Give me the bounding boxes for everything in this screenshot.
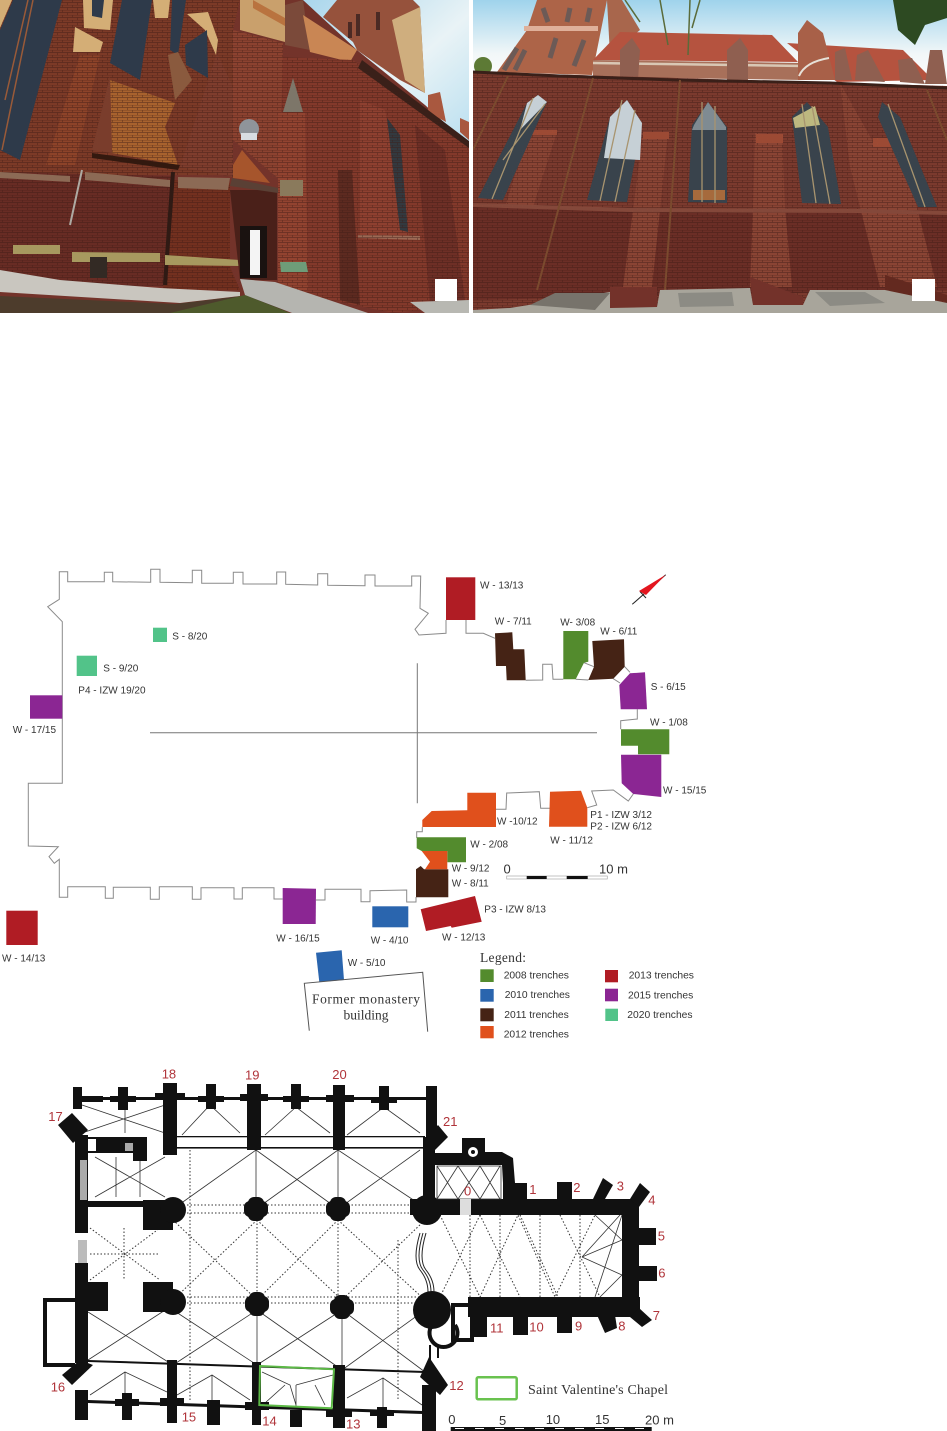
- buttress numbers: 6: [658, 1265, 666, 1280]
- red roofs: [593, 32, 798, 62]
- trenches 2020: [77, 628, 167, 676]
- buttress numbers: [48, 1066, 666, 1431]
- trench labels: W - 12/13: [442, 933, 486, 944]
- trench labels: W - 16/15: [276, 934, 320, 945]
- trench labels: W - 1/08: [650, 718, 688, 729]
- nave piers: [143, 1200, 173, 1230]
- stone bands: [72, 252, 160, 262]
- ground: [0, 270, 240, 303]
- white label square: [912, 279, 935, 301]
- chancel walls: [410, 1199, 638, 1215]
- axes: [150, 663, 597, 803]
- trench labels: W - 8/11: [452, 879, 489, 890]
- legend: Legend:: [480, 950, 526, 965]
- trenches 2015: [30, 672, 661, 924]
- sacristy: [435, 1138, 515, 1183]
- buttress numbers: 19: [245, 1067, 259, 1082]
- legend: 2015 trenches: [628, 990, 693, 1002]
- scale bar 20 m: 10: [546, 1412, 560, 1427]
- trench labels: P2 - IZW 6/12: [590, 822, 652, 833]
- north wall band: [73, 1097, 437, 1100]
- window bars: [492, 98, 925, 207]
- tower: [323, 0, 469, 140]
- trench labels: W - 7/11: [495, 616, 532, 628]
- buttress numbers: 11: [490, 1321, 504, 1336]
- trench labels: W - 11/12: [550, 836, 593, 847]
- north buttresses: [163, 1083, 177, 1155]
- trench labels: W - 2/08: [470, 840, 509, 851]
- trench labels: W- 3/08: [560, 618, 596, 628]
- chapel legend: Saint Valentine's Chapel: [528, 1383, 668, 1398]
- tower: [497, 0, 607, 75]
- tall windows: [0, 0, 208, 160]
- chapel legend: [477, 1377, 668, 1399]
- buttress numbers: 21: [443, 1114, 457, 1129]
- window glare: [520, 95, 642, 160]
- trench labels: W -10/12: [497, 817, 538, 828]
- tree on the left: [474, 57, 492, 72]
- buttress numbers: 20: [332, 1067, 347, 1082]
- legend: 2013 trenches: [629, 971, 694, 982]
- trench labels: W - 9/12: [452, 864, 490, 875]
- vault lines: [82, 1105, 622, 1408]
- wavy arch lines: [416, 1233, 434, 1292]
- passage and door: [230, 190, 277, 280]
- west wall stair openings: [78, 1139, 133, 1263]
- trench labels: [2, 580, 707, 969]
- trench labels: W - 6/11: [600, 626, 638, 638]
- scale bar 20 m: [448, 1412, 674, 1431]
- trench plan: [2, 569, 707, 1041]
- west porch: [45, 1300, 75, 1365]
- trench labels: W - 13/13: [480, 580, 524, 592]
- downpipes: [473, 76, 947, 290]
- church outline: [28, 569, 637, 902]
- buttresses: [505, 83, 937, 287]
- historic floor plan: [45, 1066, 674, 1431]
- right chapel wall: [282, 57, 469, 313]
- buttress numbers: 14: [262, 1413, 277, 1428]
- buttress numbers: 17: [48, 1109, 63, 1124]
- buttress numbers: 2: [573, 1180, 581, 1195]
- legend: 2011 trenches: [504, 1010, 569, 1021]
- scale bar 20 m: 20 m: [645, 1413, 674, 1428]
- middle wall: [233, 30, 283, 180]
- upper roofs: [240, 0, 285, 42]
- buttress numbers: 16: [51, 1380, 65, 1395]
- buttress numbers: 18: [162, 1066, 176, 1081]
- buttress and pinnacle: [180, 53, 233, 177]
- buttress numbers: 4: [648, 1192, 656, 1207]
- former monastery building: [304, 972, 428, 1032]
- trenches 2013: [6, 577, 482, 945]
- sky: [303, 0, 469, 145]
- buttress numbers: 3: [617, 1179, 624, 1194]
- buttress numbers: 0: [464, 1183, 471, 1198]
- trenches 2010: [316, 906, 408, 982]
- window mullions: [2, 0, 33, 150]
- buttress numbers: 12: [449, 1378, 464, 1393]
- buttress numbers: 5: [658, 1229, 665, 1244]
- trench labels: S - 6/15: [651, 682, 686, 693]
- former monastery building: building: [343, 1007, 389, 1022]
- south annex: [430, 1305, 472, 1347]
- trench labels: P3 - IZW 8/13: [484, 904, 546, 915]
- legend: 2008 trenches: [504, 970, 569, 981]
- legend: 2010 trenches: [505, 990, 570, 1001]
- corner diagonals: [58, 1113, 88, 1143]
- trench labels: W - 4/10: [371, 935, 409, 946]
- sunlit stonework: [0, 0, 218, 55]
- foliage: [893, 0, 947, 45]
- base courses: [610, 287, 657, 308]
- trench labels: W - 17/15: [13, 725, 56, 736]
- windows: [478, 95, 937, 207]
- scale bar 10 m: [504, 862, 628, 879]
- Saint Valentine's Chapel highlight: [259, 1366, 334, 1408]
- white label square: [435, 279, 457, 301]
- buttress numbers: 1: [529, 1182, 537, 1197]
- buttress numbers: 9: [575, 1319, 582, 1334]
- north arrow: [632, 575, 666, 604]
- transept: [423, 1137, 435, 1203]
- legend: 2012 trenches: [504, 1030, 569, 1041]
- lower chapel drum: [0, 172, 173, 286]
- scale bar 10 m: 10 m: [599, 862, 628, 876]
- main wall: [473, 72, 947, 313]
- trench labels: S - 9/20: [103, 664, 139, 675]
- left upper wall: [0, 0, 240, 175]
- tile roof: [110, 80, 178, 165]
- buttress numbers: 7: [653, 1308, 660, 1323]
- buttress numbers: 15: [182, 1410, 196, 1425]
- west wall: [75, 1135, 88, 1233]
- buttress numbers: 8: [618, 1319, 626, 1334]
- eaves: [473, 72, 947, 88]
- turret and gables: [798, 20, 835, 80]
- legend: [480, 950, 694, 1041]
- photo: church side elevation, right: [473, 0, 947, 313]
- scale bar 20 m: 5: [499, 1413, 506, 1428]
- ledge: [473, 205, 947, 213]
- right pier: [278, 113, 308, 290]
- sacristy vault: [437, 1147, 501, 1215]
- former monastery building: Former monastery: [312, 991, 420, 1006]
- legend: 2020 trenches: [627, 1010, 693, 1021]
- scale bar 10 m: 0: [504, 862, 511, 876]
- trenches 2012: [422, 791, 587, 869]
- trenches 2008: [417, 631, 669, 862]
- scale bar 20 m: 0: [448, 1412, 456, 1427]
- scale bar 20 m: 15: [595, 1412, 609, 1427]
- trench labels: W - 15/15: [663, 786, 707, 797]
- trench labels: P1 - IZW 3/12: [590, 810, 652, 821]
- trench labels: W - 5/10: [348, 958, 386, 969]
- south wall: [88, 1400, 423, 1414]
- buttress numbers: 10: [529, 1320, 544, 1335]
- walls and piers: [45, 1083, 657, 1431]
- trench labels: P4 - IZW 19/20: [78, 685, 146, 696]
- chancel buttresses: [503, 1183, 527, 1200]
- gravel and slabs: [473, 288, 947, 313]
- trench labels: S - 8/20: [172, 631, 208, 642]
- trench labels: W - 14/13: [2, 954, 46, 965]
- trenches 2011: [416, 632, 625, 897]
- photo: chapel exterior, left: [0, 0, 469, 313]
